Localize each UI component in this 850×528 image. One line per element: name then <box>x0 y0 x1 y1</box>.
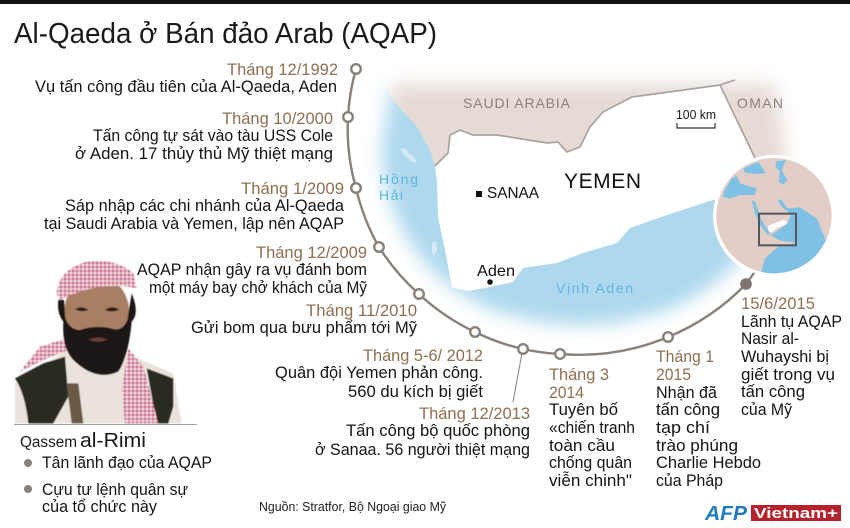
event: May-June 2012: Quân đội Yemen phản công. <box>275 364 483 382</box>
event: March 2014: «chiến tranh <box>549 419 635 437</box>
event: December 2009: một máy bay chở khách của Mỹ <box>149 279 368 297</box>
event: January 2015 <box>656 348 761 490</box>
event: January 2015: tạp chí <box>656 419 710 437</box>
event: January 2015: trào phúng <box>656 437 738 455</box>
label: Red Sea: Hải <box>379 187 403 203</box>
source: Nguồn: Stratfor, Bộ Ngoại giao Mỹ <box>259 500 447 514</box>
event: 15 June 2015: tấn công <box>741 383 805 401</box>
label: Gulf of Aden: Vịnh Aden <box>556 280 633 296</box>
event: December 2009: Tháng 12/2009 <box>256 244 367 262</box>
bullet: former commander: Cựu tư lệnh quân sự <box>42 481 188 499</box>
label: Yemen: YEMEN <box>564 170 641 193</box>
portrait: Qassem al-Rimi <box>15 261 182 423</box>
event: May-June 2012 <box>275 347 483 401</box>
event: 15 June 2015: 15/6/2015 <box>741 295 815 313</box>
borders <box>435 80 755 166</box>
event: March 2014: Tháng 3 <box>549 366 609 384</box>
locator globe <box>713 155 835 277</box>
event: December 2013 <box>315 405 530 459</box>
event: January 2015: Nhận đã <box>656 384 718 402</box>
event: March 2014 <box>549 366 635 490</box>
event: October 2000 <box>75 110 333 163</box>
map of Yemen <box>371 76 792 336</box>
event: November 2010: Tháng 11/2010 <box>306 302 417 320</box>
event: May-June 2012: 560 du kích bị giết <box>348 383 483 401</box>
scale bar <box>676 108 716 128</box>
event: 15 June 2015: Wuhayshi bị <box>741 348 829 366</box>
caption: Qassem al-Rimi: al-Rimi <box>80 430 146 452</box>
event: 15 June 2015: của Mỹ <box>741 401 793 419</box>
event: March 2014: Tuyên bố <box>549 401 618 419</box>
scale bar: 100 km <box>676 108 716 122</box>
label: Oman: OMAN <box>737 95 783 111</box>
top bar <box>0 0 850 4</box>
event: December 1992: Vụ tấn công đầu tiên của Al-Qaeda, Aden <box>35 78 337 96</box>
logo: Vietnam+: Vietnam+ <box>754 505 838 522</box>
event: October 2000: Tấn công tự sát vào tàu USS Cole <box>93 127 333 145</box>
event: March 2014: 2014 <box>549 384 584 402</box>
event: 15 June 2015: giết trong vụ <box>741 366 835 384</box>
event: 15 June 2015: Nasir al- <box>741 330 799 348</box>
event: November 2010 <box>191 302 418 337</box>
caption: Qassem al-Rimi <box>20 430 212 516</box>
event: December 2009 <box>137 244 368 297</box>
bullet: former commander: của tổ chức này <box>42 498 158 516</box>
label: Red Sea: Hồng <box>379 171 418 187</box>
event: March 2014: toàn cầu <box>549 437 615 455</box>
event: January 2009: Sáp nhập các chi nhánh của Al-Qaeda <box>65 197 345 215</box>
timeline arc <box>343 64 754 402</box>
title: Al-Qaeda ở Bán đảo Arab (AQAP) <box>14 18 437 50</box>
label: Red Sea <box>379 171 418 203</box>
label: Saudi Arabia: SAUDI ARABIA <box>463 95 571 111</box>
event: December 1992: Tháng 12/1992 <box>227 61 338 79</box>
event: October 2000: Tháng 10/2000 <box>222 110 333 128</box>
event: December 2009: AQAP nhận gây ra vụ đánh bom <box>137 261 367 279</box>
event: January 2015: Tháng 1 <box>656 348 714 366</box>
event: October 2000: ở Aden. 17 thủy thủ Mỹ thiệt mạng <box>75 145 333 163</box>
event: November 2010: Gửi bom qua bưu phẩm tới Mỹ <box>191 319 418 337</box>
logo: AFP: AFP <box>704 503 748 525</box>
bullet: new leader: Tân lãnh đạo của AQAP <box>42 454 212 472</box>
bullet: former commander <box>24 481 188 516</box>
event: January 2015: tấn công <box>656 401 720 419</box>
event: January 2009: Tháng 1/2009 <box>241 180 344 198</box>
label: Sanaa: SANAA <box>487 185 539 202</box>
event: December 2013: Tấn công bộ quốc phòng <box>346 422 530 440</box>
event: January 2015: của Pháp <box>656 472 723 490</box>
event: December 1992 <box>35 61 338 96</box>
event: 15 June 2015 <box>741 295 842 419</box>
event: December 2013: Tháng 12/2013 <box>419 405 530 423</box>
event: December 2013: ở Sanaa. 56 người thiệt mạng <box>315 441 530 459</box>
event: 15 June 2015: Lãnh tụ AQAP <box>741 313 842 331</box>
event: January 2015: Charlie Hebdo <box>656 454 761 472</box>
caption: Qassem al-Rimi: Qassem <box>20 434 77 451</box>
event: January 2009 <box>44 180 345 233</box>
event: May-June 2012: Tháng 5-6/ 2012 <box>363 347 483 365</box>
event: January 2009: tại Saudi Arabia và Yemen, lập nên AQAP <box>44 215 344 233</box>
event: January 2015: 2015 <box>656 366 691 384</box>
portrait baseline <box>14 424 197 426</box>
event: March 2014: viễn chinh" <box>549 471 632 490</box>
event: March 2014: chống quân <box>549 454 632 472</box>
label: Aden: Aden <box>477 263 515 280</box>
map base: sea, land and Yemen <box>371 76 792 336</box>
